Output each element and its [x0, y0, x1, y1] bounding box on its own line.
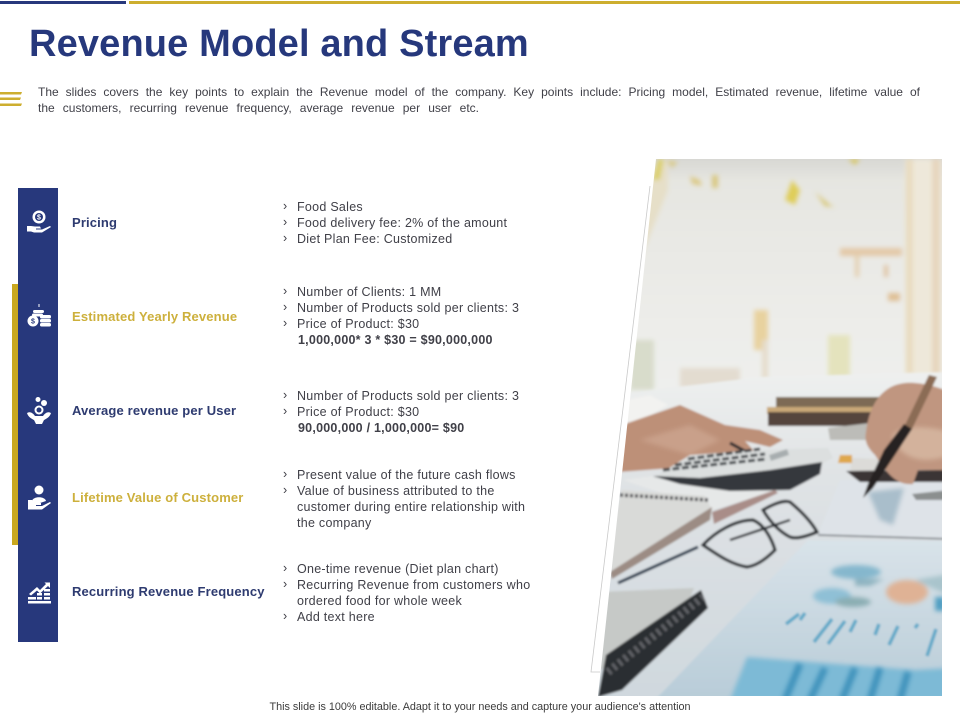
- list: lifetime value of customer: [284, 468, 525, 530]
- left sleeve: [628, 405, 664, 422]
- list: recurring revenue frequency: Add text here: [297, 610, 375, 624]
- list: estimated yearly revenue: Number of Clients: 1 MM: [297, 285, 441, 299]
- books: [776, 397, 879, 407]
- list: lifetime value of customer: Present value of the future cash flows: [297, 468, 516, 482]
- grey page and spiral notebook: [598, 588, 694, 670]
- intro text: [38, 85, 920, 115]
- top rule: navy: [0, 1, 126, 4]
- list: estimated yearly revenue: Price of Product: $30: [297, 317, 419, 331]
- list: average revenue per user: Number of Products sold per clients: 3: [297, 389, 519, 403]
- navy icon column: [18, 188, 58, 642]
- list: lifetime value of customer: Value of business attributed to the: [297, 484, 495, 498]
- list: average revenue per user: Price of Product: $30: [297, 405, 419, 419]
- list: lifetime value of customer: the company: [297, 516, 372, 530]
- left hand: [618, 405, 783, 472]
- list: pricing: Food delivery fee: 2% of the amount: [297, 216, 507, 230]
- chart paper: [658, 586, 942, 696]
- intro text: the customers, recurring revenue frequency, average revenue per user etc.: [38, 101, 479, 115]
- list: average revenue per user: [284, 389, 519, 435]
- title: Revenue Model and Stream: [29, 23, 529, 65]
- phone and paper right: [851, 458, 879, 472]
- temple bar: [618, 547, 698, 583]
- notebook: [612, 490, 710, 569]
- icon: gold menu lines: [0, 92, 22, 106]
- list: pricing: [284, 200, 507, 246]
- white outline behind photo: [591, 186, 650, 672]
- icon: growth chart: [28, 582, 51, 604]
- icon: revenue per user: [27, 397, 51, 424]
- list: recurring revenue frequency: ordered food for whole week: [297, 594, 462, 608]
- top rule: gold: [129, 1, 960, 4]
- photo: desk with calculator, glasses and charts: [590, 159, 942, 696]
- pie charts: [813, 565, 950, 611]
- heading: average revenue per user: Average revenue per User: [72, 403, 236, 418]
- paper under calculator: [708, 492, 758, 508]
- window detail: [630, 159, 942, 390]
- right hand: [865, 383, 950, 484]
- heading: recurring revenue frequency: Recurring Revenue Frequency: [72, 584, 265, 599]
- heading: lifetime value of customer: Lifetime Value of Customer: [72, 490, 244, 505]
- icon: coins: [28, 304, 51, 326]
- list: pricing: Diet Plan Fee: Customized: [297, 232, 452, 246]
- bar marks: [786, 613, 936, 656]
- glasses: [703, 501, 817, 567]
- upper right paper: [818, 480, 950, 540]
- list: recurring revenue frequency: One-time revenue (Diet plan chart): [297, 562, 499, 576]
- list: lifetime value of customer: customer during entire relationship with: [297, 500, 525, 514]
- pen under hand: [728, 440, 746, 452]
- fountain pen: [905, 375, 937, 429]
- list: recurring revenue frequency: Recurring Revenue from customers who: [297, 578, 530, 592]
- desk surface: [585, 372, 950, 700]
- blue block chart: [730, 657, 950, 700]
- list: estimated yearly revenue: Number of Products sold per clients: 3: [297, 301, 519, 315]
- icon: pricing: [27, 210, 51, 232]
- footer note: This slide is 100% editable. Adapt it to your needs and capture your audience's attention: [269, 701, 690, 713]
- list: estimated yearly revenue: 1,000,000* 3 * $30 = $90,000,000: [298, 333, 493, 347]
- list: pricing: Food Sales: [297, 200, 363, 214]
- gold side bar: [12, 284, 18, 545]
- list: average revenue per user: 90,000,000 / 1,000,000= $90: [298, 421, 464, 435]
- icon: lifetime value: [28, 486, 51, 510]
- heading: pricing: Pricing: [72, 215, 117, 230]
- intro text: The slides covers the key points to explain the Revenue model of the company. Key points include: Pricing model, Estimated revenue, lifetime value of: [38, 85, 920, 99]
- list: estimated yearly revenue: [284, 285, 519, 347]
- heading: estimated yearly revenue: Estimated Yearly Revenue: [72, 309, 237, 324]
- list: recurring revenue frequency: [284, 562, 530, 624]
- calculator: [667, 449, 791, 478]
- icon: pricing: $: [37, 214, 41, 222]
- icon: coins: $: [31, 318, 35, 326]
